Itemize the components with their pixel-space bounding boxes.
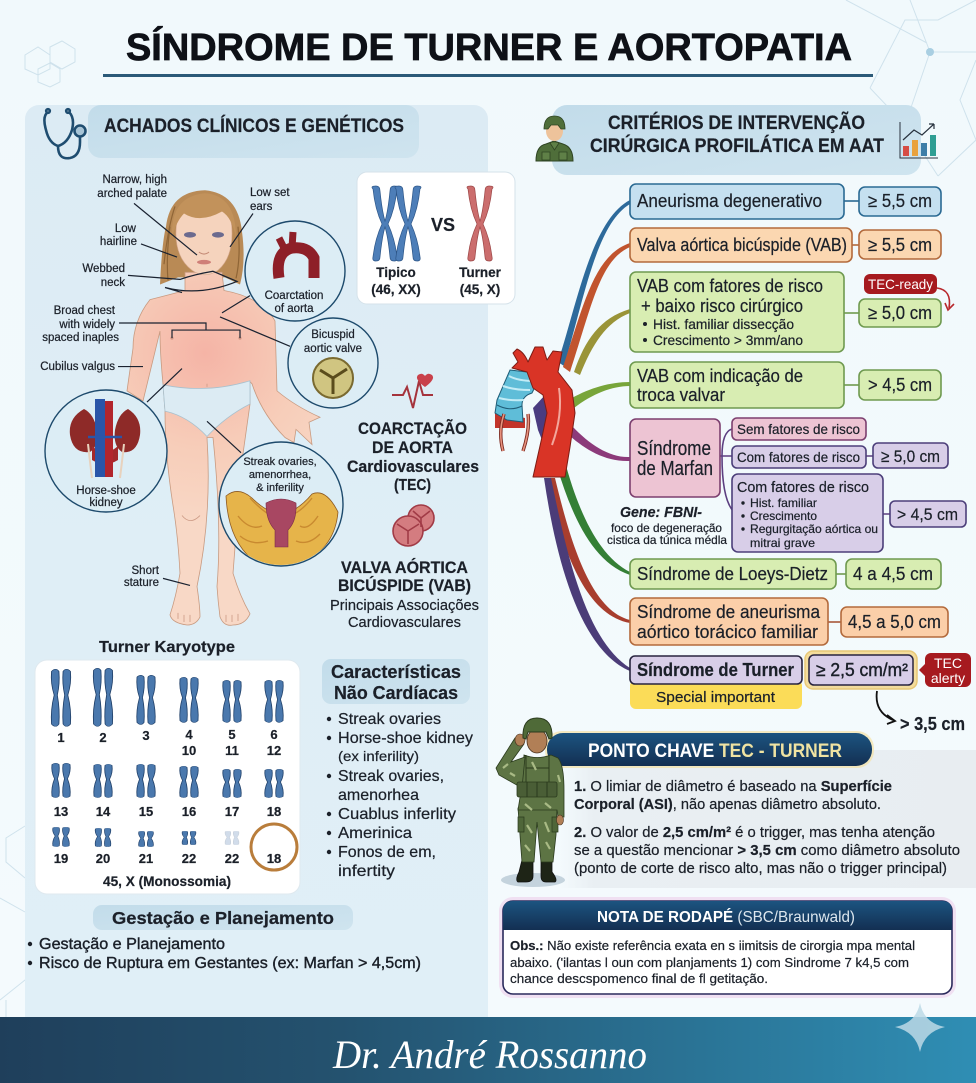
circle: horse-shoe kidney (45, 390, 167, 512)
heading: critérios de intervenção: CIRÚRGICA PROFILÁTICA EM AAT (590, 135, 884, 157)
heading: achados clínicos e genéticos (88, 105, 419, 158)
heading: características não cardíacas (322, 659, 470, 704)
hands (515, 734, 525, 746)
text: coarctação de aorta: (TEC) (394, 477, 431, 494)
text: key points: 2. O valor de 2,5 cm/m² é o trigger, mas tenha atenção (574, 824, 935, 841)
list: características não cardíacas: Streak ovaries, (338, 768, 444, 785)
list: gestação: Risco de Ruptura em Gestantes (ex: Marfan > 4,5cm) (39, 955, 421, 972)
note: gene fbn1: Gene: FBNI- (620, 504, 702, 521)
chromosome comparison card (357, 172, 515, 304)
list: características não cardíacas: Horse-shoe kidney (338, 730, 473, 747)
boots (517, 860, 556, 882)
vs label: VS (431, 215, 455, 235)
text: key points: se a questão mencionar > 3,5 cm como diâmetro absoluto (574, 842, 960, 859)
text: valva aórtica bicúspide: VALVA AÓRTICA (341, 558, 468, 577)
criterion: síndrome de marfan: Hist. familiar (750, 496, 817, 510)
footnote text: Obs.: Não existe referência exata en s iimitsis de cirorgia mpa mental (510, 938, 915, 953)
footer bar (0, 1017, 976, 1083)
text: valva aórtica bicúspide: Cardiovasculares (348, 615, 461, 631)
criterion: valva aórtica bicúspide: Valva aórtica bicúspide (VAB) (637, 235, 847, 255)
title: SÍNDROME DE TURNER E AORTOPATIA (126, 25, 852, 69)
criterion: síndrome de turner: ≥ 2,5 cm/m² (816, 660, 908, 680)
criterion: vab com fatores de risco (630, 272, 941, 352)
body labels: Narrow, high (102, 174, 167, 186)
marfan: sem fatores (732, 418, 866, 440)
circle: bicuspid aortic valve (288, 318, 378, 408)
criterion: vab com indicação de troca (630, 362, 941, 408)
karyotype card (35, 660, 300, 894)
criterion: loeys-dietz (630, 559, 941, 589)
tag: tec-ready with arrow: TEC-ready (868, 276, 933, 292)
chromosome numbers: 17 (225, 804, 239, 819)
criterion: síndrome de turner: Special important (656, 689, 776, 706)
body labels: hairline (100, 236, 137, 248)
criterion: vab com fatores de risco: Crescimento > 3mm/ano (653, 332, 803, 348)
chromosome numbers: 3 (142, 728, 150, 743)
criterion: vab com fatores de risco: + baixo risco cirúrgico (641, 296, 803, 316)
criterion: síndrome de marfan: mitrai grave (750, 536, 815, 550)
footnote heading: NOTA DE RODAPÉ (SBC/Braunwald) (597, 907, 855, 926)
banner: ponto chave: PONTO CHAVE TEC - TURNER (588, 741, 842, 762)
criterion: aneurisma degenerativo: Aneurisma degenerativo (637, 191, 822, 211)
criterion: vab com fatores de risco: ≥ 5,0 cm (868, 303, 932, 323)
illustration: girl body with Turner features (127, 190, 320, 625)
icon: Turner chromosome (467, 186, 493, 261)
missing chromosome highlight (251, 824, 297, 870)
criterion: valva aórtica bicúspide: ≥ 5,5 cm (868, 235, 932, 255)
text: key points: Corporal (ASI), não apenas diâmetro absoluto. (574, 796, 881, 813)
tag: tec alerty (919, 653, 971, 687)
arrow: greater than 3.5 cm (877, 691, 965, 734)
criterion: aneurisma torácico familiar: Síndrome de aneurisma (637, 602, 821, 622)
criterion: valva aórtica bicúspide (630, 228, 941, 262)
diaper (163, 381, 250, 436)
typical label: Tipico (376, 265, 416, 280)
list: características não cardíacas: infertity (338, 863, 395, 880)
list: características não cardíacas: Fonos de em, (338, 844, 436, 861)
criterion: vab com fatores de risco: VAB com fatores de risco (637, 276, 823, 296)
helmet (523, 718, 552, 739)
note: gene fbn1: cistica da túnica médla (607, 533, 727, 547)
heading: características não cardíacas: Não Cardíacas (334, 683, 458, 703)
chromosome numbers: 2 (99, 730, 107, 745)
criterion: aneurisma degenerativo: ≥ 5,5 cm (868, 191, 932, 211)
camouflage streaks (503, 762, 560, 851)
heading: gestação e planejamento: Gestação e Planejamento (112, 908, 334, 928)
chromosome numbers: 20 (96, 851, 110, 866)
footnote text (510, 938, 915, 986)
criterion: síndrome de marfan: Regurgitação aórtica ou (750, 522, 878, 536)
text: key points: 1. O limiar de diâmetro é baseado na Superfície (574, 778, 892, 795)
circle: streak ovaries: Streak ovaries, (243, 456, 317, 468)
arrow: greater than 3.5 cm: > 3,5 cm (900, 714, 965, 734)
chromosome numbers: 4 (185, 727, 193, 742)
heading: características não cardíacas: Características (331, 662, 461, 682)
text: valva aórtica bicúspide (330, 558, 479, 631)
heading: critérios de intervenção: CRITÉRIOS DE INTERVENÇÃO (608, 112, 865, 134)
circle: streak ovaries: amenorrhea, (249, 469, 311, 481)
chromosomes row two (52, 763, 283, 798)
criterion: aneurisma torácico familiar: aórtico torácico familiar (637, 622, 818, 642)
decorative sparkle (895, 1003, 945, 1052)
criterion: síndrome de marfan (630, 418, 966, 552)
circle: coarctation of aorta (245, 221, 345, 321)
tag: tec alerty: alerty (931, 670, 965, 686)
footnote box (499, 897, 956, 998)
criterion: aneurisma torácico familiar: 4,5 a 5,0 cm (848, 612, 941, 632)
icon: growth chart (900, 122, 938, 158)
icon: stethoscope (44, 109, 86, 158)
icon: soldier bust (536, 116, 573, 161)
nose and mouth (199, 252, 209, 254)
chromosome numbers: 5 (228, 727, 236, 742)
circle: horse-shoe kidney: kidney (89, 497, 123, 509)
criterion: vab com indicação de troca: troca valvar (637, 385, 725, 405)
chromosome numbers: 15 (139, 804, 153, 819)
footnote text: abaixo. ('ilantas l oun com planjaments 1) com Sindrome 7 k4,5 com (510, 955, 909, 970)
body labels: ears (250, 201, 273, 213)
chromosome numbers: 19 (54, 851, 68, 866)
body labels: with widely (58, 319, 115, 331)
text: key points (574, 778, 960, 877)
list: características não cardíacas: amenorhea (338, 787, 419, 804)
list: características não cardíacas: Cuablus inferlity (338, 806, 456, 823)
list: características não cardíacas: (ex inferility) (338, 748, 419, 764)
list: gestação (28, 936, 421, 972)
list: características não cardíacas (327, 711, 473, 880)
illustration: aorta (495, 347, 575, 477)
monosomy caption: 45, X (Monossomia) (103, 873, 231, 889)
body labels: Cubilus valgus (40, 361, 115, 373)
list: características não cardíacas: Streak ovaries (338, 711, 441, 728)
chromosome numbers: 14 (96, 804, 111, 819)
circle: bicuspid aortic valve: aortic valve (304, 343, 362, 355)
chromosome numbers: 22 (182, 851, 196, 866)
criterion: síndrome de turner (630, 651, 917, 709)
criterion: síndrome de marfan: > 4,5 cm (897, 505, 958, 524)
face (527, 729, 547, 753)
chromosome numbers: 18 (267, 851, 281, 866)
torso and right arm (518, 755, 564, 817)
criterion: síndrome de marfan: Com fatores de risco (737, 449, 860, 465)
face (176, 198, 232, 275)
chromosome numbers: 21 (139, 851, 153, 866)
chromosome numbers: 18 (267, 804, 281, 819)
banner: ponto chave (545, 731, 874, 768)
criterion: síndrome de marfan: de Marfan (637, 458, 713, 480)
criterion: loeys-dietz: Síndrome de Loeys-Dietz (637, 564, 828, 584)
turner label: (45, X) (460, 282, 500, 297)
body labels: spaced inaples (42, 332, 119, 344)
text: coarctação de aorta: Cardiovasculares (347, 457, 479, 476)
circle: streak ovaries (219, 442, 343, 566)
tag: tec alerty: TEC (934, 655, 962, 671)
body labels: arched palate (97, 188, 167, 200)
chromosome numbers: 11 (225, 743, 239, 758)
footnote text: chance descspomenco final de fl getitação. (510, 971, 768, 986)
chromosome numbers: 13 (54, 804, 68, 819)
criterion: loeys-dietz: 4 a 4,5 cm (853, 564, 933, 584)
chromosomes row three (53, 827, 239, 847)
list: características não cardíacas: Amerinica (338, 825, 412, 842)
criterion: síndrome de marfan: Crescimento (750, 509, 817, 523)
callout lines (118, 203, 290, 585)
criterion: síndrome de marfan: Sem fatores de risco (737, 421, 860, 437)
criterion: síndrome de turner: Síndrome de Turner (637, 660, 794, 680)
text: coarctação de aorta: DE AORTA (372, 438, 453, 457)
chromosome numbers: 22 (225, 851, 239, 866)
chromosome numbers: 1 (57, 730, 65, 745)
body labels (40, 174, 290, 589)
icon: ecg and heart (392, 374, 433, 408)
body labels: neck (101, 277, 125, 289)
marfan: fatores detail (732, 474, 883, 552)
grey band behind key point (560, 750, 976, 888)
icon: XX chromosomes (372, 186, 421, 261)
heading: critérios de intervenção (552, 105, 921, 175)
note: gene fbn1: foco de degeneração (611, 521, 722, 535)
illustration: saluting soldier (496, 718, 565, 887)
criterion: vab com indicação de troca: VAB com indicação de (637, 366, 803, 386)
body labels: Short (132, 565, 160, 577)
signature: Dr. André Rossanno (332, 1032, 647, 1077)
circle: streak ovaries: & inferility (256, 482, 304, 494)
circle: coarctation of aorta: of aorta (274, 303, 314, 315)
criterion: vab com fatores de risco: Hist. familiar dissecção (653, 316, 794, 332)
special important label (630, 680, 802, 709)
text: coarctação de aorta: COARCTAÇÃO (358, 418, 467, 438)
heading: achados clínicos e genéticos: ACHADOS CLÍNICOS E GENÉTICOS (104, 115, 404, 137)
body labels: stature (124, 577, 159, 589)
branches from aorta to criteria (544, 200, 630, 671)
criterion: síndrome de marfan: ≥ 5,0 cm (881, 447, 940, 466)
chromosome numbers (54, 727, 281, 866)
chromosome numbers: 10 (182, 743, 196, 758)
criterion: aneurisma torácico familiar (630, 598, 948, 645)
eyes (184, 232, 196, 238)
text: coarctação de aorta (347, 418, 479, 494)
hair back (160, 190, 244, 284)
body (127, 272, 320, 625)
note: gene fbn1 (607, 504, 727, 547)
criterion: vab com indicação de troca: > 4,5 cm (868, 375, 932, 395)
circle: coarctation of aorta: Coarctation (265, 290, 323, 302)
circle: bicuspid aortic valve: Bicuspid (311, 329, 355, 341)
body labels: Low set (250, 187, 290, 199)
saluting arm (496, 738, 525, 788)
body labels: Broad chest (54, 305, 116, 317)
fringe (172, 193, 236, 238)
text: valva aórtica bicúspide: BICÚSPIDE (VAB) (338, 576, 471, 595)
turner label: Turner (459, 265, 502, 280)
heading: turner karyotype: Turner Karyotype (99, 639, 235, 656)
icon: aortic valves (393, 505, 434, 546)
list: gestação: Gestação e Planejamento (39, 936, 225, 953)
chromosome numbers: 16 (182, 804, 196, 819)
chromosomes row one (51, 668, 283, 726)
text: key points: (ponto de corte de risco alto, mas não o trigger principal) (574, 860, 947, 877)
typical label: (46, XX) (371, 282, 421, 297)
chromosome numbers: 12 (267, 743, 281, 758)
marfan: com fatores (732, 446, 866, 468)
tag: tec-ready with arrow (864, 274, 954, 310)
circle: horse-shoe kidney: Horse-shoe (76, 485, 136, 497)
heading: gestação e planejamento (93, 905, 353, 930)
criterion: aneurisma degenerativo (630, 184, 941, 219)
text: valva aórtica bicúspide: Principais Associações (330, 598, 479, 614)
chromosome numbers: 6 (270, 727, 278, 742)
body labels: Low (115, 223, 137, 235)
body labels: Webbed (82, 263, 125, 275)
left panel background (25, 105, 488, 1030)
trousers (518, 808, 557, 862)
vest (517, 782, 557, 797)
criterion: síndrome de marfan: Síndrome (637, 438, 711, 460)
criterion: síndrome de marfan: Com fatores de risco (737, 479, 869, 496)
